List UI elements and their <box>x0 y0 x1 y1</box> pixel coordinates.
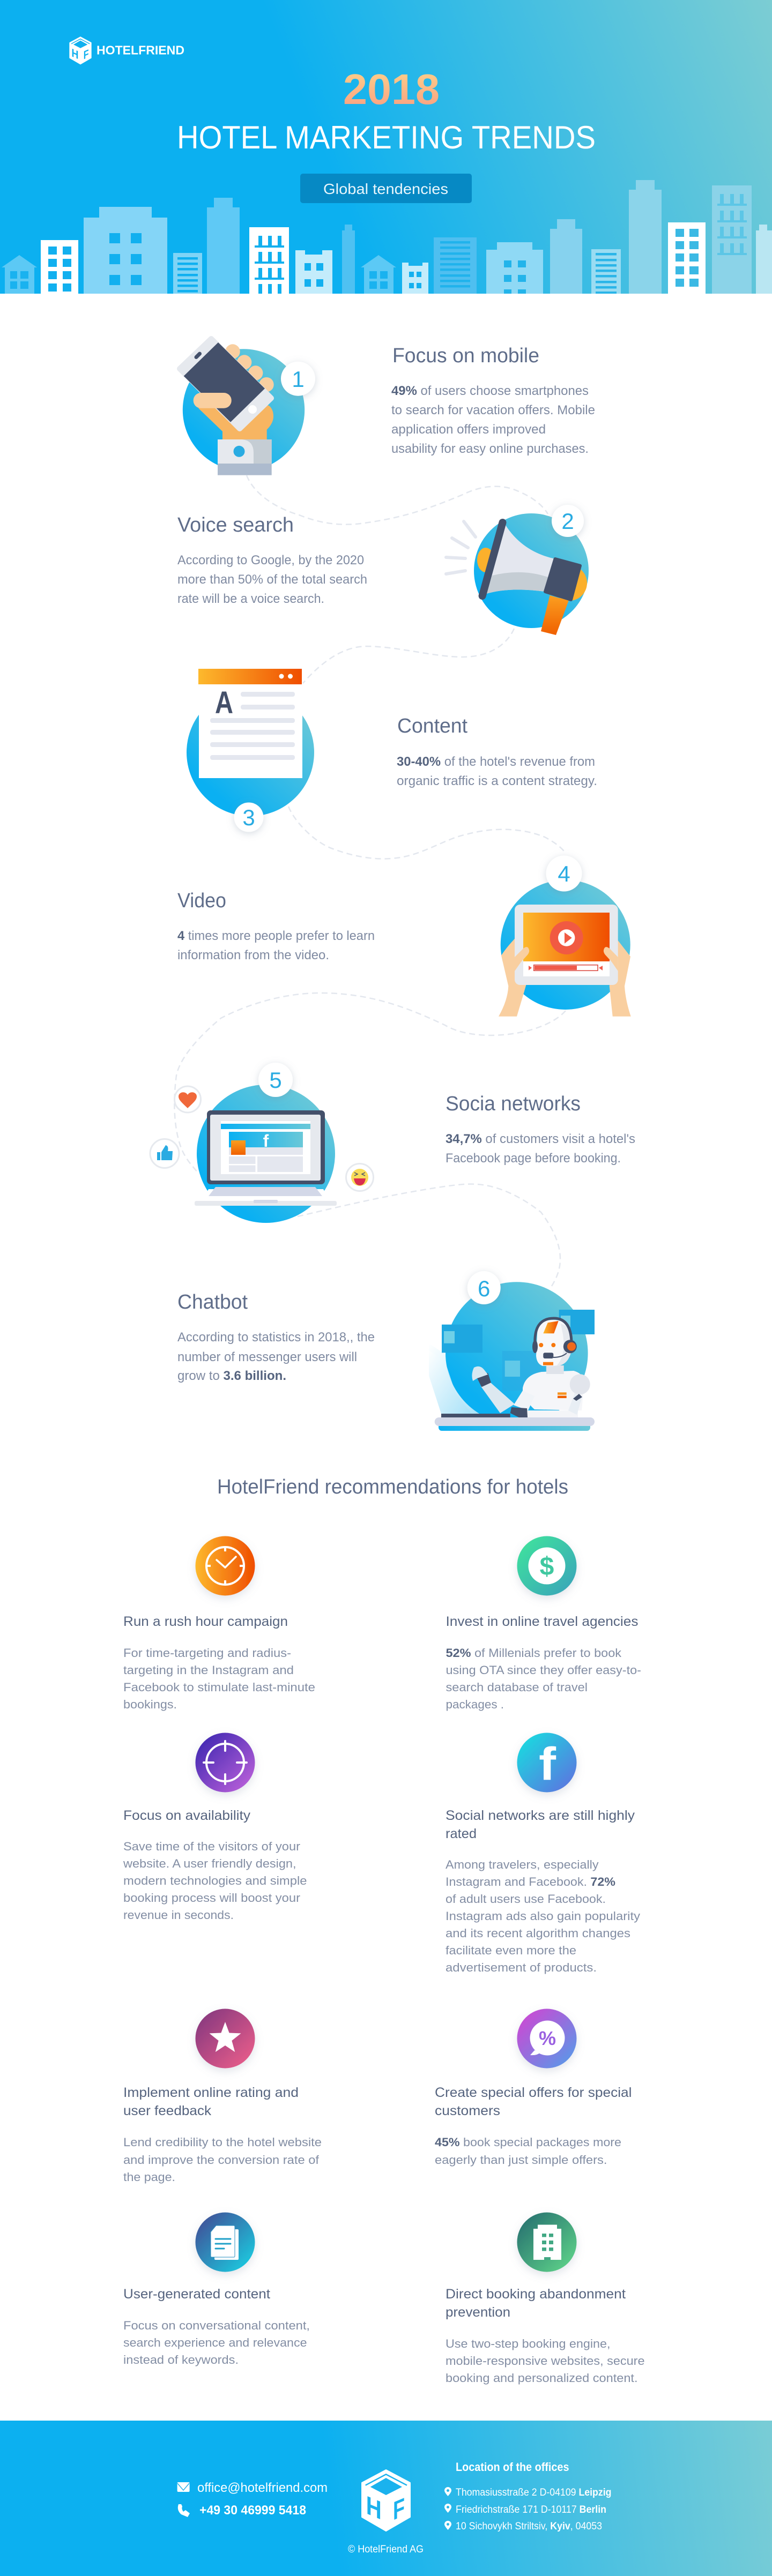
recommendation 4: social networks: Instagram ads also gain popularity <box>446 1909 640 1923</box>
office: Berlin: Friedrichstraße 171 D-10117 Berlin <box>456 2504 606 2515</box>
trend 2 text: Voice search <box>177 514 367 606</box>
trend 4 illustration: tablet with video <box>499 855 631 1017</box>
trend 6 text: Chatbot: Chatbot <box>177 1291 248 1313</box>
title: HOTEL MARKETING TRENDS <box>177 120 596 155</box>
icon: dollar: $ <box>540 1552 554 1581</box>
recommendation 5: online rating: Implement online rating and <box>123 2085 299 2100</box>
recommendation 1: rush hour <box>123 1536 315 1711</box>
footer logo <box>362 2470 410 2531</box>
recommendation 4: social networks <box>446 1733 640 1974</box>
trend 3 text: Content: 30-40% of the hotel's revenue from <box>397 755 595 769</box>
icon: facebook: f <box>539 1738 556 1790</box>
recommendation 7: user-generated content: User-generated content <box>123 2287 270 2302</box>
icon: percent bubble: % <box>539 2027 556 2049</box>
recommendation 4: social networks: Instagram and Facebook. 72% <box>446 1875 615 1888</box>
recommendation 2: online travel agencies: 52% of Millenials prefer to book <box>446 1646 622 1660</box>
recommendation 4: social networks: Among travelers, especially <box>446 1858 598 1871</box>
recommendation 4: social networks: facilitate even more the <box>446 1944 576 1957</box>
recommendation 4: social networks: and its recent algorithm changes <box>446 1927 630 1940</box>
recommendation 5: online rating <box>123 2008 322 2184</box>
recommendation 3: availability: website. A user friendly design, <box>123 1857 296 1870</box>
recommendation 8: direct booking: booking and personalized content. <box>446 2371 638 2385</box>
office: Leipzig: Thomasiusstraße 2 D-04109 Leipzig <box>456 2487 611 2498</box>
trend 1 text: Focus on mobile <box>391 345 595 456</box>
trend 6 text: Chatbot <box>177 1291 375 1383</box>
trend 2 illustration: megaphone <box>446 505 589 635</box>
year 2018: 2018 <box>343 65 440 113</box>
recommendation 1: rush hour: For time-targeting and radius- <box>123 1646 291 1660</box>
icon: document <box>195 2212 255 2272</box>
trend 6 illustration: chatbot robot <box>429 1271 595 1431</box>
icon: phone <box>178 2504 190 2517</box>
trend 2 text: Voice search: According to Google, by the 2020 <box>177 553 364 568</box>
recommendation 5: online rating: user feedback <box>123 2103 212 2118</box>
recommendation 1: rush hour: targeting in the Instagram and <box>123 1663 294 1677</box>
number badge 5: 5 <box>269 1067 282 1093</box>
recommendation 7: user-generated content <box>123 2212 310 2366</box>
icon: hotel building <box>517 2212 577 2272</box>
section heading: recommendations: HotelFriend recommendations for hotels <box>217 1476 568 1498</box>
icon: envelope <box>177 2482 190 2492</box>
recommendation 3: availability <box>123 1733 307 1922</box>
trend 6 text: Chatbot: grow to 3.6 billion. <box>177 1369 286 1383</box>
recommendation 7: user-generated content: search experience and relevance <box>123 2336 307 2349</box>
office locations <box>444 2460 611 2532</box>
recommendation 8: direct booking <box>446 2212 644 2385</box>
recommendation 7: user-generated content: instead of keywords. <box>123 2353 239 2366</box>
trend 1 text: Focus on mobile: application offers improved <box>391 422 546 437</box>
badge: Global tendencies <box>300 174 472 203</box>
number badge 5 <box>258 1063 293 1097</box>
header panel <box>0 0 772 294</box>
icon: clock <box>195 1536 255 1596</box>
recommendation 8: direct booking: mobile-responsive websites, secure <box>446 2354 644 2368</box>
recommendation 4: social networks: rated <box>446 1826 477 1841</box>
icon: percent bubble <box>517 2008 577 2069</box>
trend 1 text: Focus on mobile: Focus on mobile <box>392 345 539 367</box>
office locations: Location of the offices <box>456 2460 569 2474</box>
recommendation 4: social networks: Social networks are still highly <box>446 1808 635 1823</box>
logo: HotelFriend: HOTELFRIEND <box>96 43 184 57</box>
trend 4 text: Video: Video <box>177 890 226 912</box>
recommendation 6: special offers: 45% book special packages more <box>435 2136 621 2149</box>
number badge 4 <box>546 855 582 892</box>
recommendation 3: availability: modern technologies and simple <box>123 1874 307 1887</box>
recommendation 2: online travel agencies <box>446 1536 641 1711</box>
number badge 2 <box>552 505 584 537</box>
recommendation 6: special offers: Create special offers for special <box>435 2085 632 2100</box>
trend 1 illustration: hand holding phone <box>180 339 315 475</box>
trend 4 text: Video: 4 times more people prefer to learn <box>177 929 375 943</box>
contact: email: office@hotelfriend.com <box>197 2481 328 2495</box>
trend 2 text: Voice search: Voice search <box>177 514 294 536</box>
icon: facebook <box>517 1733 577 1792</box>
footer logo: H <box>366 2490 382 2526</box>
recommendation 8: direct booking: Direct booking abandonment <box>446 2287 626 2302</box>
recommendation 8: direct booking: prevention <box>446 2305 510 2320</box>
icon: star <box>195 2008 255 2069</box>
copyright: © HotelFriend AG <box>348 2544 424 2555</box>
trend 5 text: Socia networks: 34,7% of customers visit a hotel's <box>446 1132 635 1146</box>
reaction: thumbs up <box>150 1139 179 1168</box>
contact: phone: +49 30 46999 5418 <box>199 2503 306 2518</box>
trend 4 text: Video: information from the video. <box>177 948 329 962</box>
recommendation 2: online travel agencies: search database of travel <box>446 1681 588 1694</box>
recommendation 8: direct booking: Use two-step booking engine, <box>446 2337 610 2350</box>
trend 2 text: Voice search: more than 50% of the total search <box>177 572 367 587</box>
trend 3 illustration: content page: A <box>215 685 233 720</box>
trend 6 text: Chatbot: According to statistics in 2018,, the <box>177 1330 375 1345</box>
trend 5 text: Socia networks: Facebook page before booking. <box>446 1151 621 1166</box>
number badge 6: 6 <box>478 1276 490 1301</box>
recommendation 6: special offers: eagerly than just simple offers. <box>435 2153 607 2167</box>
footer logo: F <box>393 2492 405 2526</box>
recommendation 2: online travel agencies: using OTA since they offer easy-to- <box>446 1663 641 1677</box>
recommendation 2: online travel agencies: packages . <box>446 1698 504 1711</box>
trend 5 text: Socia networks <box>446 1093 635 1166</box>
recommendation 6: special offers <box>435 2008 632 2167</box>
logo mark: F <box>84 47 89 62</box>
number badge 3: 3 <box>242 805 255 830</box>
number badge 1: 1 <box>292 367 305 392</box>
logo: HotelFriend <box>70 37 184 64</box>
number badge 6 <box>467 1271 501 1304</box>
dashed connectors between trends <box>174 475 566 1286</box>
recommendation 1: rush hour: Facebook to stimulate last-minute <box>123 1681 315 1694</box>
recommendation 3: availability: booking process will boost your <box>123 1891 300 1905</box>
recommendation 1: rush hour: Run a rush hour campaign <box>123 1614 288 1629</box>
trend 3 illustration: content page <box>187 669 314 832</box>
footer panel <box>0 2421 772 2576</box>
trend 5 illustration: laptop with Facebook page: f <box>263 1131 269 1151</box>
logo mark: H <box>71 46 78 62</box>
trend 1 text: Focus on mobile: usability for easy online purchases. <box>391 442 589 456</box>
trend 2 text: Voice search: rate will be a voice search. <box>177 592 324 606</box>
recommendation 6: special offers: customers <box>435 2103 500 2118</box>
reaction: laughing face <box>346 1164 373 1191</box>
recommendation 7: user-generated content: Focus on conversational content, <box>123 2319 310 2332</box>
trend 4 text: Video <box>177 890 375 962</box>
logo mark <box>70 37 91 64</box>
trend 5 text: Socia networks: Socia networks <box>446 1093 581 1115</box>
trend 6 text: Chatbot: number of messenger users will <box>177 1350 357 1364</box>
skyline <box>2 180 772 294</box>
recommendation 5: online rating: Lend credibility to the hotel website <box>123 2136 322 2149</box>
trend 3 text: Content: organic traffic is a content strategy. <box>397 774 597 788</box>
recommendation 5: online rating: the page. <box>123 2170 175 2184</box>
icon: dollar <box>517 1536 577 1596</box>
reaction: heart <box>175 1086 201 1112</box>
trend 3 text: Content: Content <box>397 715 467 737</box>
trend 5 illustration: laptop with Facebook page <box>150 1063 373 1223</box>
office: Kyiv: 10 Sichovykh Striltsiv, Kyiv, 04053 <box>456 2521 602 2532</box>
recommendation 3: availability: Save time of the visitors of your <box>123 1840 300 1853</box>
recommendation 5: online rating: and improve the conversion rate of <box>123 2153 320 2167</box>
trend 1 text: Focus on mobile: 49% of users choose smartphones <box>391 384 589 398</box>
recommendation 1: rush hour: bookings. <box>123 1698 177 1711</box>
number badge 1 <box>281 362 315 396</box>
number badge 3 <box>234 803 264 832</box>
recommendation 2: online travel agencies: Invest in online travel agencies <box>446 1614 638 1629</box>
recommendation 3: availability: Focus on availability <box>123 1808 251 1823</box>
badge: Global tendencies: Global tendencies <box>323 181 448 197</box>
number badge 4: 4 <box>558 861 570 886</box>
trend 3 text: Content <box>397 715 597 788</box>
icon: target <box>195 1733 255 1792</box>
number badge 2: 2 <box>561 509 574 534</box>
recommendation 4: social networks: of adult users use Facebook. <box>446 1892 606 1906</box>
recommendation 4: social networks: advertisement of products. <box>446 1961 597 1974</box>
trend 1 text: Focus on mobile: to search for vacation offers. Mobile <box>391 403 595 417</box>
recommendation 3: availability: revenue in seconds. <box>123 1908 234 1922</box>
